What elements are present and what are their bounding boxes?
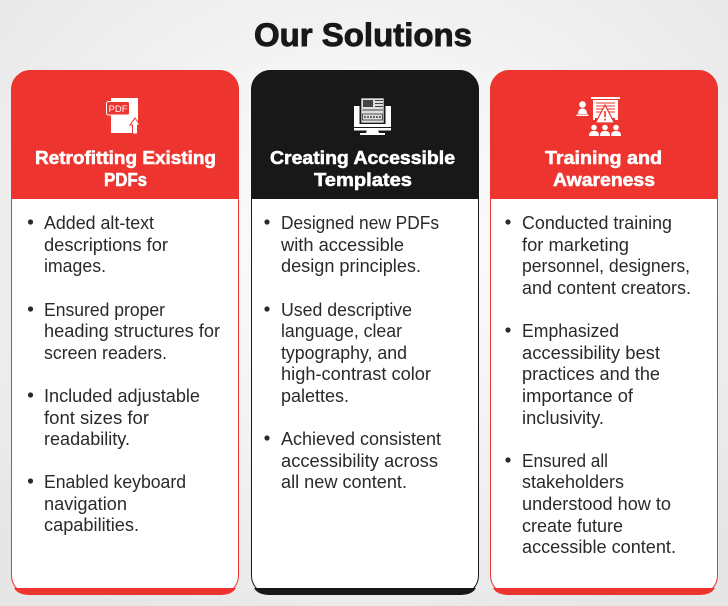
bullet list: training: for marketing xyxy=(522,235,629,255)
bullet list: training xyxy=(505,213,691,557)
bullet list: templates: Used descriptive xyxy=(281,300,412,320)
bullet list: retrofitting: Enabled keyboard xyxy=(44,472,186,492)
bullet list: retrofitting: navigation xyxy=(44,494,127,514)
bullet list: training: and content creators. xyxy=(522,278,691,298)
bullet list: training: personnel, designers, xyxy=(522,256,690,276)
panel: retrofitting existing PDFs xyxy=(11,70,239,595)
icon: PDF document xyxy=(106,98,140,134)
bullet list: retrofitting: capabilities. xyxy=(44,515,139,535)
bullet list: training: Emphasized xyxy=(522,321,619,341)
bullet list: templates: typography, and xyxy=(281,343,407,363)
heading: retrofitting existing PDFs xyxy=(35,147,216,190)
heading: training and awareness: Training and xyxy=(545,147,662,168)
bullet list: training: importance of xyxy=(522,386,634,406)
bullet list: training: accessible content. xyxy=(522,537,676,557)
bullet list: retrofitting: font sizes for xyxy=(44,408,149,428)
bullet list: templates: accessibility across xyxy=(281,451,438,471)
bullet list: retrofitting: descriptions for xyxy=(44,235,168,255)
bullet list: retrofitting: heading structures for xyxy=(44,321,220,341)
bullet list: training: stakeholders xyxy=(522,472,624,492)
bullet list: templates: design principles. xyxy=(281,256,421,276)
bullet list: templates: all new content. xyxy=(281,472,407,492)
heading: retrofitting existing PDFs: Retrofitting Existing xyxy=(35,147,216,168)
bullet list: training: Ensured all xyxy=(522,451,608,471)
heading: training and awareness: Awareness xyxy=(553,169,655,190)
icon: training presentation xyxy=(576,97,621,136)
bullet list: retrofitting: Ensured proper xyxy=(44,300,165,320)
bullet list: templates xyxy=(264,213,441,492)
heading: creating accessible templates: Creating Accessible xyxy=(270,147,455,168)
panel: training and awareness xyxy=(490,70,718,595)
bullet list: templates: with accessible xyxy=(280,235,404,255)
heading: retrofitting existing PDFs: PDFs xyxy=(104,169,147,190)
bullet list: training: inclusivity. xyxy=(522,408,604,428)
bullet list: templates: palettes. xyxy=(281,386,349,406)
icon: PDF document: PDF xyxy=(108,104,128,115)
bullet list: retrofitting: Included adjustable xyxy=(44,386,200,406)
bullet list: training: practices and the xyxy=(522,364,660,384)
bullet list: training: understood how to xyxy=(522,494,671,514)
title: Our Solutions xyxy=(254,17,472,53)
heading: creating accessible templates xyxy=(270,147,455,190)
bullet list: templates: language, clear xyxy=(281,321,402,341)
bullet list: retrofitting xyxy=(28,213,220,535)
bullet list: retrofitting: readability. xyxy=(44,429,130,449)
heading: training and awareness xyxy=(545,147,662,190)
bullet list: templates: high-contrast color xyxy=(281,364,431,384)
bullet list: training: accessibility best xyxy=(522,343,660,363)
bullet list: retrofitting: Added alt-text xyxy=(44,213,154,233)
panel: creating accessible templates xyxy=(251,70,479,595)
icon: monitor with template xyxy=(354,96,391,135)
bullet list: retrofitting: screen readers. xyxy=(44,343,167,363)
bullet list: training: Conducted training xyxy=(522,213,672,233)
bullet list: retrofitting: images. xyxy=(44,256,106,276)
heading: creating accessible templates: Templates xyxy=(314,169,412,190)
bullet list: templates: Achieved consistent xyxy=(281,429,441,449)
bullet list: training: create future xyxy=(522,516,623,536)
bullet list: templates: Designed new PDFs xyxy=(281,213,439,233)
